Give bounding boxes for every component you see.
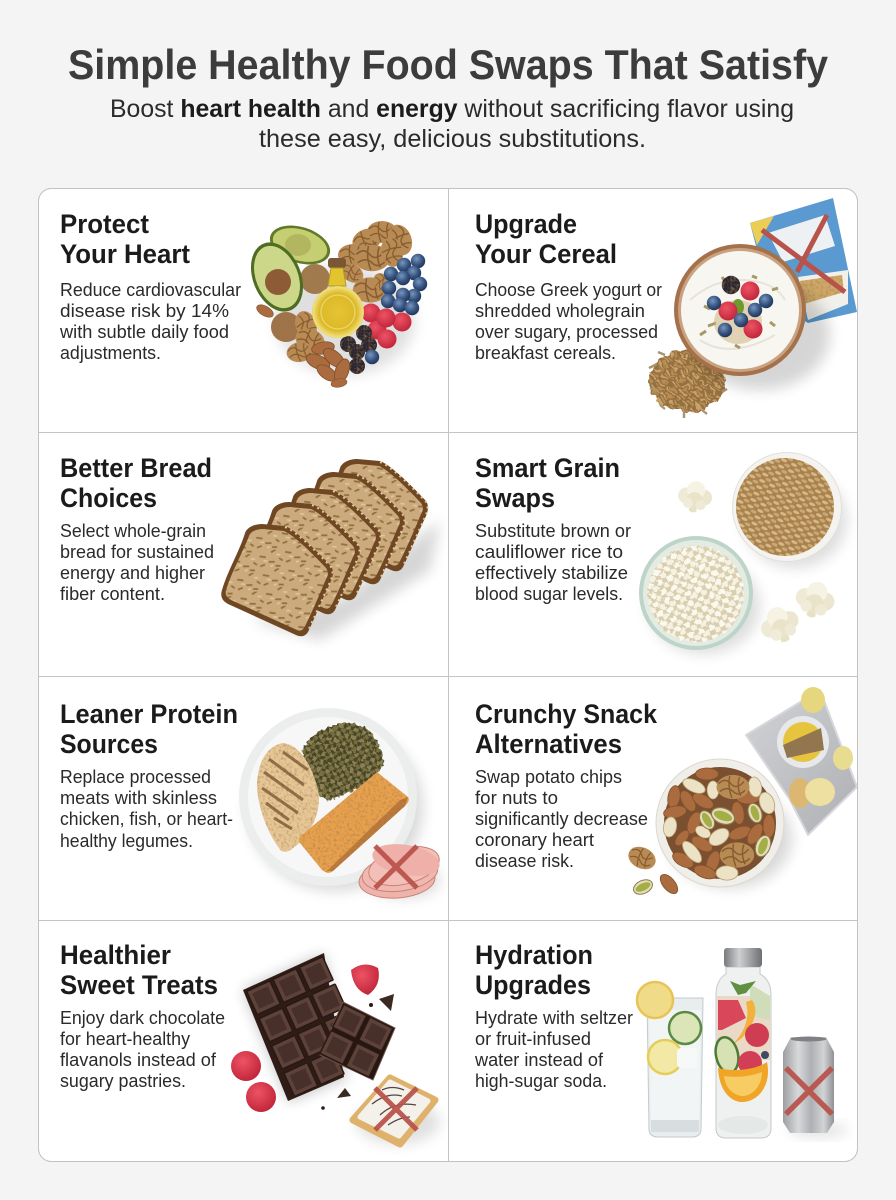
heading: better bread choices: Choices (60, 483, 157, 513)
title: Simple Healthy Food Swaps That Satisfy (68, 41, 829, 88)
icon: crossed out pastry (353, 1078, 440, 1144)
text: smart grain swaps: Substitute brown or (475, 520, 631, 541)
text: hydration upgrades (474, 1007, 633, 1091)
text: leaner protein sources: chicken, fish, or heart- (60, 808, 233, 829)
icon: sliced whole-grain bread (221, 459, 440, 640)
heading: leaner protein sources: Leaner Protein (60, 699, 238, 729)
text: healthier sweet treats: Enjoy dark chocolate (60, 1007, 225, 1028)
panel: leaner protein sources (39, 676, 448, 920)
icon: fruit-infused water bottle (712, 948, 771, 1138)
text: crunchy snack alternatives: disease risk. (475, 850, 574, 871)
panel: crunchy snack alternatives (448, 676, 857, 920)
icon: bowl of mixed nuts (656, 759, 792, 888)
icon: dark chocolate bar (243, 953, 372, 1102)
heading: smart grain swaps (475, 453, 620, 513)
icon: crossed out processed meat (358, 839, 443, 901)
icon: cauliflower florets (676, 478, 839, 648)
text: protect your heart: disease risk by 14% (60, 300, 229, 321)
text: protect your heart: Reduce cardiovascular (60, 279, 241, 300)
text: hydration upgrades: or fruit-infused (475, 1028, 591, 1049)
heading: healthier sweet treats (60, 940, 218, 1000)
heading: smart grain swaps: Smart Grain (475, 453, 620, 483)
text: hydration upgrades: high-sugar soda. (475, 1070, 607, 1091)
text: better bread choices (60, 520, 214, 604)
heading: hydration upgrades: Hydration (475, 940, 593, 970)
panel: healthier sweet treats (39, 920, 448, 1161)
panel: protect your heart (39, 189, 448, 432)
heading: leaner protein sources: Sources (60, 729, 158, 759)
panel: smart grain swaps (448, 432, 857, 676)
subtitle: Boost heart health and energy without sacrificing flavor using (110, 95, 794, 123)
text: protect your heart (59, 279, 241, 363)
text: leaner protein sources: meats with skinless (60, 787, 217, 808)
icon: broken chocolate piece (319, 994, 395, 1110)
panel: hydration upgrades (448, 920, 857, 1161)
text: healthier sweet treats: for heart-healthy (60, 1028, 191, 1049)
icon: loose nuts (625, 843, 681, 897)
text: smart grain swaps: blood sugar levels. (475, 583, 623, 604)
text: leaner protein sources: Replace processed (60, 766, 211, 787)
heading: healthier sweet treats: Healthier (60, 940, 171, 970)
text: better bread choices: energy and higher (60, 562, 205, 583)
text: upgrade your cereal: over sugary, processed (475, 321, 658, 342)
text: protect your heart: adjustments. (60, 342, 161, 363)
heading: protect your heart (60, 209, 190, 269)
heading: upgrade your cereal: Your Cereal (475, 239, 617, 269)
text: hydration upgrades: water instead of (474, 1049, 604, 1070)
heading: healthier sweet treats: Sweet Treats (60, 970, 218, 1000)
icon: crossed out soda can (783, 1036, 848, 1136)
heading: crunchy snack alternatives (475, 699, 658, 759)
heading: better bread choices (60, 453, 212, 513)
text: leaner protein sources (60, 766, 233, 851)
text: protect your heart: with subtle daily food (59, 321, 229, 342)
text: leaner protein sources: healthy legumes. (60, 830, 193, 851)
heading: hydration upgrades: Upgrades (475, 970, 591, 1000)
text: smart grain swaps: cauliflower rice to (475, 541, 623, 562)
heading: protect your heart: Your Heart (60, 239, 190, 269)
heading: upgrade your cereal (475, 209, 617, 269)
text: crunchy snack alternatives (475, 766, 648, 871)
text: smart grain swaps (475, 520, 631, 604)
icon: grain pile (649, 350, 727, 418)
text: better bread choices: bread for sustained (60, 541, 214, 562)
panel: upgrade your cereal (448, 189, 857, 432)
text: upgrade your cereal (475, 279, 662, 363)
icon: glass of seltzer with lemon and cucumber (637, 982, 703, 1137)
text: better bread choices: fiber content. (60, 583, 165, 604)
heading: upgrade your cereal: Upgrade (475, 209, 577, 239)
icon: brown rice bowl (732, 452, 847, 568)
text: crunchy snack alternatives: for nuts to (475, 787, 558, 808)
heading: leaner protein sources (60, 699, 238, 759)
icon: cauliflower rice bowl (639, 536, 760, 654)
text: crunchy snack alternatives: significantly decrease (475, 808, 648, 829)
icon: heart of healthy foods (241, 219, 427, 389)
text: healthier sweet treats: flavanols instead of (60, 1049, 217, 1070)
subtitle (110, 95, 794, 153)
panel: better bread choices (39, 432, 448, 676)
heading: crunchy snack alternatives: Alternatives (475, 729, 622, 759)
icon: raspberries (231, 964, 379, 1112)
text: upgrade your cereal: shredded wholegrain (475, 300, 645, 321)
text: crunchy snack alternatives: coronary heart (475, 829, 594, 850)
card grid (38, 188, 858, 1162)
heading: protect your heart: Protect (60, 209, 149, 239)
text: hydration upgrades: Hydrate with seltzer (475, 1007, 633, 1028)
text: healthier sweet treats: sugary pastries. (60, 1070, 186, 1091)
heading: crunchy snack alternatives: Crunchy Snack (475, 699, 658, 729)
icon: crossed out cereal box (750, 198, 857, 323)
heading: hydration upgrades (475, 940, 593, 1000)
heading: better bread choices: Better Bread (60, 453, 212, 483)
text: smart grain swaps: effectively stabilize (475, 562, 628, 583)
icon: crossed out chip bag (746, 687, 857, 835)
subtitle: these easy, delicious substitutions. (259, 125, 646, 153)
text: crunchy snack alternatives: Swap potato chips (475, 766, 622, 787)
text: upgrade your cereal: breakfast cereals. (475, 342, 616, 363)
icon: plate with chicken, lentils and salmon (239, 708, 423, 891)
text: better bread choices: Select whole-grain (60, 520, 206, 541)
heading: smart grain swaps: Swaps (475, 483, 555, 513)
text: healthier sweet treats (60, 1007, 225, 1091)
icon: yogurt bowl with berries (674, 244, 830, 390)
text: upgrade your cereal: Choose Greek yogurt or (475, 279, 662, 300)
